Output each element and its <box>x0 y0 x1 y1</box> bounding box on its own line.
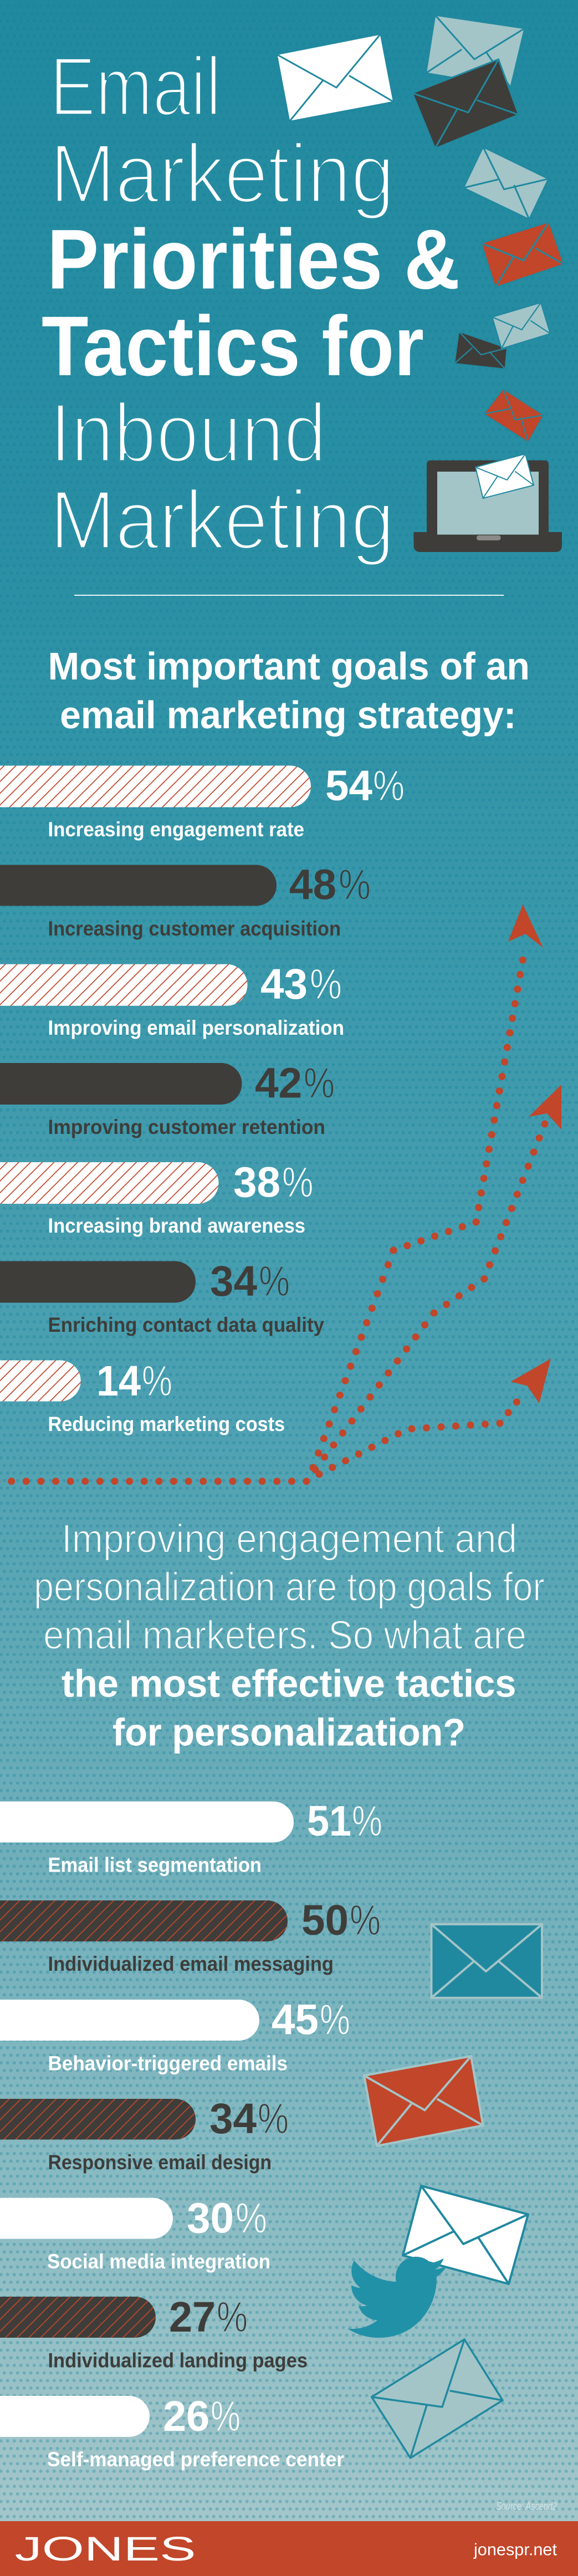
tactic bar: preference center 26% <box>0 2393 344 2471</box>
tactic bar: individualized messaging 50% <box>0 1897 381 1975</box>
paragraph: transition to tactics: the most effective tactics <box>62 1662 516 1705</box>
goal bar: brand awareness 38%: 38 <box>233 1158 280 1206</box>
goal bar: engagement rate 54%: % <box>373 762 405 810</box>
goal bar: email personalization 43%: Improving email personalization <box>48 1016 344 1039</box>
title: Email <box>50 39 221 133</box>
goal bar: brand awareness 38% <box>0 1158 314 1237</box>
icon: teal envelope <box>431 1924 542 1998</box>
tactic bar: behavior-triggered 45%: 45 <box>272 1996 319 2044</box>
tactic bar: landing pages 27% <box>0 2293 308 2372</box>
icon: small red envelope <box>484 389 544 442</box>
tactic bar: responsive design 34%: 34 <box>209 2095 257 2143</box>
goal bar: engagement rate 54%: Increasing engagement rate <box>48 818 304 841</box>
title: Tactics for <box>42 299 424 393</box>
icon: light envelope, tilted <box>463 147 549 219</box>
icon: twitter bird <box>347 2257 447 2338</box>
icon: laptop with envelope <box>413 454 562 552</box>
paragraph: transition to tactics: email marketers. So what are <box>43 1613 526 1658</box>
tactic bar: behavior-triggered 45%: Behavior-triggered emails <box>48 2052 288 2075</box>
goal bar: contact data quality 34%: 34 <box>210 1258 257 1305</box>
tactic bar: preference center 26%: 26 <box>163 2393 209 2440</box>
tactic bar: responsive design 34% <box>0 2095 289 2174</box>
icon: small dark envelope <box>454 331 507 369</box>
tactic bar: landing pages 27%: Individualized landing pages <box>48 2349 308 2372</box>
source note: Source: Ascend2 <box>496 2501 557 2513</box>
title: Priorities & <box>47 212 460 307</box>
tactic bar: landing pages 27%: % <box>217 2293 248 2341</box>
icon: red envelope <box>481 222 564 288</box>
tactic bar: list segmentation 51%: 51 <box>307 1797 351 1845</box>
goal bar: contact data quality 34%: Enriching contact data quality <box>48 1313 324 1336</box>
tactic bar: preference center 26%: % <box>211 2393 241 2440</box>
goal bar: brand awareness 38%: Increasing brand awareness <box>48 1214 305 1237</box>
tactic bar: preference center 26%: Self-managed preference center <box>47 2448 344 2471</box>
tactic bar: list segmentation 51% <box>0 1797 382 1877</box>
goal bar: customer acquisition 48%: 48 <box>289 861 336 909</box>
tactic bar: behavior-triggered 45%: % <box>320 1996 350 2044</box>
icon: white envelope, top <box>277 34 394 122</box>
tactic bar: responsive design 34%: Responsive email design <box>48 2151 272 2174</box>
title: Inbound <box>50 386 326 479</box>
icon: light envelope, top right <box>426 15 525 88</box>
heading: most important goals <box>48 645 530 737</box>
goal bar: customer acquisition 48%: % <box>339 861 371 909</box>
icon: white envelope carried by bird <box>403 2186 528 2284</box>
title: Marketing <box>50 473 395 566</box>
tactic bar: social media 30%: 30 <box>187 2195 234 2242</box>
tactic bar: social media 30%: Social media integration <box>47 2250 270 2273</box>
tactic bar: individualized messaging 50%: 50 <box>301 1897 349 1944</box>
icon: red envelope, lower <box>364 2056 483 2146</box>
goal bar: customer retention 42%: 42 <box>255 1060 302 1107</box>
goal bar: engagement rate 54% <box>0 762 405 841</box>
tactic bar: social media 30%: % <box>236 2195 267 2242</box>
goal bar: customer retention 42% <box>0 1060 335 1138</box>
goal bar: engagement rate 54%: 54 <box>325 762 372 810</box>
tactic bar: landing pages 27%: 27 <box>169 2293 216 2341</box>
goal bar: contact data quality 34% <box>0 1258 324 1336</box>
dotted growth arrows <box>0 904 561 1481</box>
goal bar: marketing costs 14%: 14 <box>96 1357 141 1405</box>
paragraph: transition to tactics: for personalization? <box>112 1710 466 1754</box>
title: Marketing <box>50 126 395 220</box>
paragraph: transition to tactics <box>34 1517 545 1754</box>
goal bar: customer acquisition 48% <box>0 861 371 940</box>
tactic bar: individualized messaging 50%: % <box>350 1897 381 1944</box>
goal bar: customer retention 42%: % <box>304 1060 335 1107</box>
heading: most important goals: email marketing strategy: <box>60 693 516 737</box>
tactic bar: individualized messaging 50%: Individualized email messaging <box>48 1953 334 1975</box>
goal bar: customer retention 42%: Improving customer retention <box>48 1116 325 1138</box>
icon: light envelope, lower <box>372 2339 503 2458</box>
divider <box>74 595 504 596</box>
goal bar: email personalization 43%: % <box>310 960 342 1008</box>
tactic bar: list segmentation 51%: Email list segmentation <box>48 1853 262 1877</box>
tactic bar: list segmentation 51%: % <box>352 1797 382 1845</box>
tactic bar: social media 30% <box>0 2195 270 2273</box>
goal bar: marketing costs 14%: % <box>142 1357 172 1405</box>
paragraph: transition to tactics: Improving engagement and <box>62 1517 517 1561</box>
goal bar: email personalization 43% <box>0 960 344 1039</box>
website: jonespr.net <box>473 2539 557 2559</box>
tactic bar: behavior-triggered 45% <box>0 1996 350 2075</box>
goal bar: email personalization 43%: 43 <box>260 960 308 1008</box>
footer <box>0 2521 578 2576</box>
goal bar: customer acquisition 48%: Increasing customer acquisition <box>48 917 341 940</box>
icon: small light envelope <box>492 303 550 349</box>
icon: dark envelope, top right <box>412 59 519 149</box>
goal bar: marketing costs 14% <box>0 1357 285 1435</box>
goal bar: marketing costs 14%: Reducing marketing costs <box>48 1413 285 1435</box>
heading: most important goals: Most important goals of an <box>48 645 530 688</box>
tactic bar: responsive design 34%: % <box>258 2095 289 2143</box>
title <box>42 39 460 566</box>
goal bar: brand awareness 38%: % <box>282 1158 314 1206</box>
goal bar: contact data quality 34%: % <box>259 1258 290 1305</box>
logo: JONES: JONES <box>15 2530 196 2568</box>
